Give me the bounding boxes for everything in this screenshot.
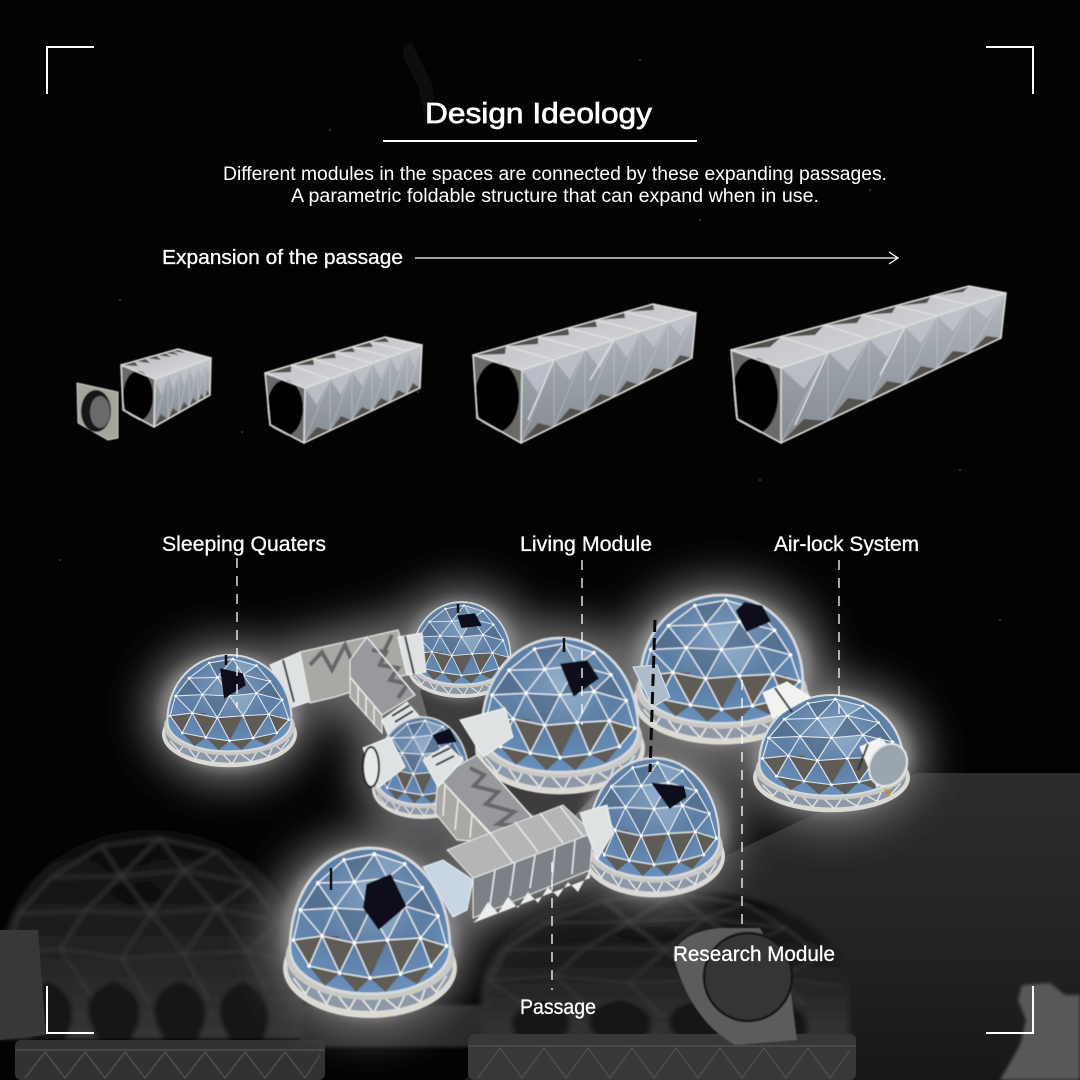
- passage: front horizontal: [423, 805, 613, 923]
- dome: front right module: [583, 758, 725, 897]
- junction collar: [633, 665, 670, 707]
- lunar ground: [465, 773, 1080, 1080]
- faded cylinder module: [673, 928, 797, 1045]
- description text: A parametric foldable structure that can expand when in use.: [291, 186, 819, 207]
- tight rim glow: [161, 595, 911, 1018]
- title underline: [383, 140, 697, 142]
- air-lock collar rear: [763, 682, 810, 718]
- title: Design Ideology: [425, 98, 653, 130]
- passage: front diagonal: [423, 745, 532, 845]
- dome: living module: [475, 638, 645, 794]
- label: living module: Living Module: [520, 533, 652, 556]
- description text: [223, 164, 887, 207]
- leader line: passage: [551, 862, 553, 990]
- faded dome centre: [481, 888, 849, 1043]
- faded dome left: [0, 830, 303, 1039]
- air-lock tube left: [363, 737, 405, 788]
- passage stage 2: [265, 337, 422, 443]
- label: sleeping quarters: Sleeping Quaters: [162, 533, 326, 556]
- inner gap fill: [420, 690, 600, 830]
- label: research module: Research Module: [673, 943, 835, 966]
- collar to living module: [460, 708, 513, 757]
- faded base band between domes: [300, 1005, 490, 1047]
- passage stage 4: [731, 286, 1006, 443]
- lens: [363, 747, 379, 787]
- passage: sleeping to back module: [270, 630, 426, 708]
- dome: front left module: [283, 848, 457, 1018]
- passage: long diagonal rear: [350, 637, 420, 735]
- faded astronaut: [1000, 983, 1080, 1080]
- leader line: research module: [741, 680, 743, 930]
- dome: research module: [633, 595, 810, 745]
- expansion arrow: [415, 252, 898, 264]
- dome: small centre module: [363, 708, 513, 819]
- stars: [60, 60, 1000, 620]
- air-lock end tube: [858, 737, 915, 796]
- faint satellite: [405, 45, 432, 120]
- habitat cluster: [160, 594, 915, 1019]
- dome: sleeping quarters: [162, 655, 297, 767]
- dome: back module: [408, 602, 515, 698]
- end cap module: [77, 383, 118, 440]
- black dashed leader: [226, 604, 655, 890]
- wide outer glow: [160, 594, 912, 1019]
- description text: Different modules in the spaces are connected by these expanding passages.: [223, 164, 887, 185]
- leader line: living module: [581, 560, 583, 725]
- expansion heading: Expansion of the passage: [162, 247, 403, 269]
- passage stage 3: [473, 304, 696, 443]
- faded base ring centre: [468, 1034, 856, 1080]
- leader line: sleeping quarters: [236, 558, 238, 708]
- window: [432, 728, 457, 745]
- label: passage: Passage: [520, 996, 596, 1019]
- dome: air-lock module: [753, 695, 910, 812]
- passage stage 1: [121, 349, 211, 427]
- label: air-lock system: Air-lock System: [774, 533, 919, 556]
- leader line: air-lock system: [838, 560, 840, 715]
- faded airlock tube left: [0, 930, 46, 1040]
- faded base ring left: [15, 1040, 325, 1080]
